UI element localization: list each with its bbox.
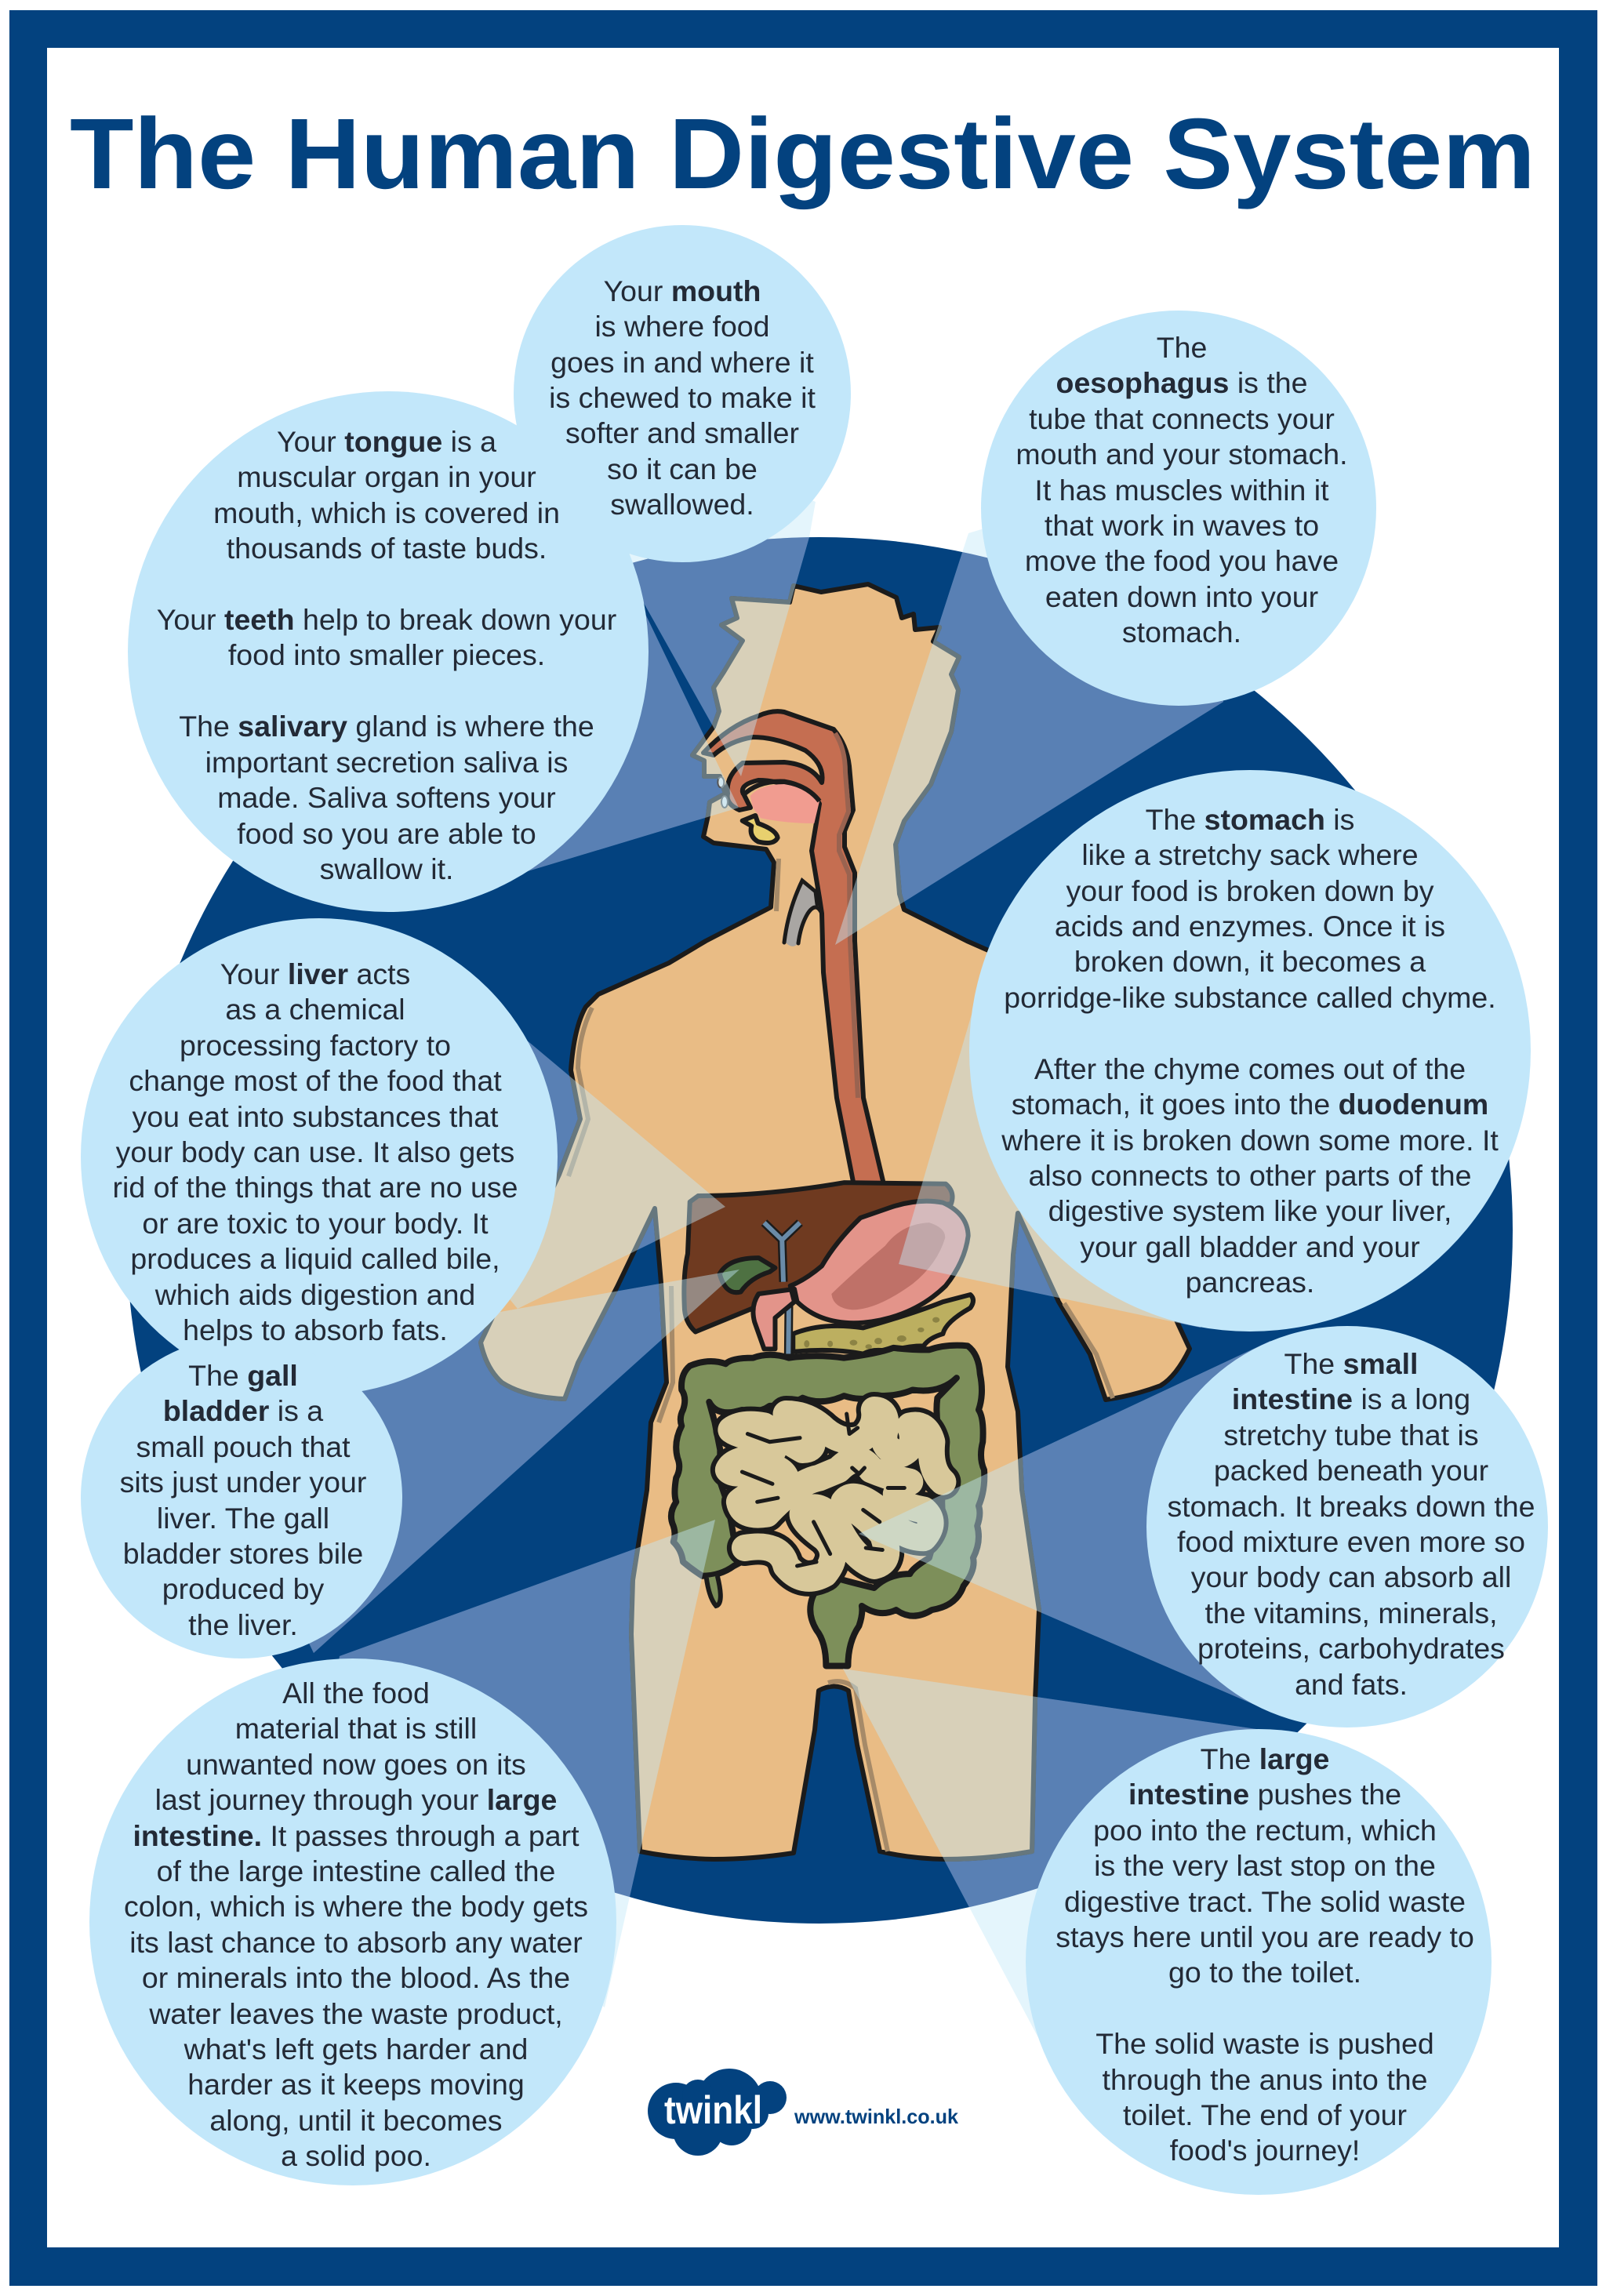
text: stomach: digestive system like your liver, <box>1048 1194 1452 1227</box>
human body figure <box>481 584 1190 1859</box>
text: liver: as a chemical <box>225 993 405 1026</box>
text: mouth <box>549 274 816 521</box>
text: oesophagus: mouth and your stomach. <box>1016 438 1348 470</box>
text: oesophagus: It has muscles within it <box>1034 474 1329 507</box>
website url: www.twinkl.co.uk <box>794 2105 959 2128</box>
text: liver: Your liver acts <box>220 957 410 990</box>
text: large intestine right: The large <box>1201 1742 1329 1775</box>
text: tongue, teeth, salivary gland <box>157 425 616 885</box>
text: stomach: your gall bladder and your <box>1080 1230 1420 1263</box>
text: liver: rid of the things that are no use <box>113 1171 518 1204</box>
pancreas <box>793 1295 973 1354</box>
text: large intestine left: material that is still <box>235 1712 477 1745</box>
text: tongue, teeth, salivary gland: mouth, which is covered in <box>213 496 560 529</box>
text: small intestine: The small <box>1284 1347 1418 1380</box>
text: oesophagus: that work in waves to <box>1045 509 1319 542</box>
text: liver: change most of the food that <box>129 1064 502 1097</box>
callout wedges pointing to organs <box>235 439 1333 2058</box>
wedge: stomach <box>899 1012 1250 1328</box>
callout circles <box>81 225 1548 2195</box>
pancreas spots <box>804 1317 939 1349</box>
text: large intestine left: harder as it keeps moving <box>187 2068 525 2101</box>
text: small intestine: your body can absorb all <box>1191 1560 1511 1593</box>
text: small intestine: packed beneath your <box>1214 1454 1488 1487</box>
text: large intestine left <box>124 1677 588 2172</box>
text: gall bladder: small pouch that <box>136 1430 351 1463</box>
text: stomach: also connects to other parts of the <box>1029 1159 1471 1192</box>
text: mouth: is chewed to make it <box>549 381 816 414</box>
text: liver: processing factory to <box>180 1029 451 1062</box>
text: stomach: broken down, it becomes a <box>1074 945 1426 978</box>
text: mouth: is where food <box>594 310 770 343</box>
text: gall bladder: sits just under your <box>120 1466 366 1499</box>
text: large intestine left: last journey through your large <box>155 1783 557 1816</box>
text: stomach: pancreas. <box>1186 1266 1314 1299</box>
text: tongue, teeth, salivary gland: The salivary gland is where the <box>179 710 594 743</box>
text: stomach: like a stretchy sack where <box>1081 838 1419 871</box>
text: oesophagus <box>1016 331 1348 648</box>
text: mouth: softer and smaller <box>565 416 799 449</box>
text: oesophagus: tube that connects your <box>1029 402 1335 435</box>
text: gall bladder: bladder stores bile <box>123 1537 363 1570</box>
text: small intestine: intestine is a long <box>1232 1382 1470 1415</box>
text: liver: which aids digestion and <box>154 1278 475 1311</box>
wedge: gall bladder <box>235 1270 739 1653</box>
small intestine coils <box>729 1410 943 1578</box>
text: large intestine right: through the anus into the <box>1103 2063 1427 2096</box>
text: large intestine left: a solid poo. <box>281 2139 431 2172</box>
text: oesophagus: The <box>1157 331 1207 364</box>
stomach <box>753 1201 968 1349</box>
body edge shadows <box>569 859 1113 1851</box>
bile duct <box>764 1222 800 1358</box>
circle: large intestine left <box>89 1658 616 2185</box>
text: oesophagus: eaten down into your <box>1045 580 1318 613</box>
text: gall bladder: the liver. <box>188 1608 298 1641</box>
circle: gall bladder <box>81 1337 402 1658</box>
circle: oesophagus <box>981 311 1376 706</box>
esophagus shadow <box>835 733 858 1098</box>
text: stomach: stomach, it goes into the duodenum <box>1012 1088 1488 1121</box>
text: mouth: Your mouth <box>604 274 761 307</box>
text: tongue, teeth, salivary gland: food so you are able to <box>237 817 536 850</box>
text: oesophagus: move the food you have <box>1025 544 1339 577</box>
text: tongue, teeth, salivary gland: Your tongue is a <box>277 425 496 458</box>
text: large intestine left: its last chance to absorb any water <box>129 1926 583 1959</box>
text: large intestine right: go to the toilet. <box>1168 1956 1361 1989</box>
text: liver: produces a liquid called bile, <box>130 1242 500 1275</box>
text: large intestine right: intestine pushes the <box>1128 1778 1401 1811</box>
text: small intestine: food mixture even more so <box>1177 1525 1525 1558</box>
circle: small intestine <box>1146 1326 1548 1727</box>
teeth <box>718 777 724 787</box>
text: mouth: goes in and where it <box>550 346 814 379</box>
text: gall bladder: bladder is a <box>163 1394 323 1427</box>
text: small intestine: proteins, carbohydrates <box>1197 1632 1505 1665</box>
text: tongue, teeth, salivary gland: food into smaller pieces. <box>228 638 545 671</box>
organs in the abdomen <box>671 1183 984 1666</box>
text: large intestine right: food's journey! <box>1170 2134 1360 2167</box>
text: large intestine left: what's left gets harder and <box>183 2033 528 2065</box>
text: oesophagus: stomach. <box>1122 616 1241 648</box>
logo: twinkl cloud <box>648 2069 787 2156</box>
navy background circle <box>126 537 1513 1924</box>
text: gall bladder: liver. The gall <box>157 1502 329 1535</box>
text: gall bladder: The gall <box>188 1359 298 1392</box>
wedge: mouth <box>605 439 816 776</box>
text: large intestine left: of the large intestine called the <box>157 1855 555 1887</box>
text: large intestine left: colon, which is where the body gets <box>124 1890 588 1923</box>
mouth and throat details <box>718 777 819 843</box>
text: stomach: acids and enzymes. Once it is <box>1055 910 1445 943</box>
pink mouth cavity <box>750 784 819 823</box>
text: mouth: swallowed. <box>610 488 754 521</box>
text: stomach <box>1001 803 1499 1299</box>
wedge: large intestine left <box>314 1520 715 2007</box>
circle: stomach <box>969 770 1531 1331</box>
large intestine colon <box>671 1346 984 1666</box>
text: small intestine <box>1167 1347 1535 1701</box>
text: liver: or are toxic to your body. It <box>142 1207 489 1240</box>
text: gall bladder: produced by <box>162 1572 324 1605</box>
text: liver: your body can use. It also gets <box>116 1135 514 1168</box>
text: tongue, teeth, salivary gland: swallow it. <box>320 852 453 885</box>
text: large intestine left: All the food <box>282 1677 430 1709</box>
text: large intestine right <box>1056 1742 1474 2167</box>
text: stomach: where it is broken down some more. It <box>1001 1124 1499 1157</box>
text: tongue, teeth, salivary gland: made. Saliva softens your <box>217 781 556 814</box>
circle: large intestine right <box>1026 1729 1492 2195</box>
text: tongue, teeth, salivary gland: thousands of taste buds. <box>227 532 547 565</box>
wedge: tongue <box>471 549 739 888</box>
text: stomach: The stomach is <box>1146 803 1354 836</box>
circle: liver <box>81 918 558 1395</box>
text: tongue, teeth, salivary gland: Your teeth help to break down your <box>157 603 616 636</box>
text: small intestine: stomach. It breaks down the <box>1167 1490 1535 1523</box>
wedge: oesophagus <box>835 470 1223 945</box>
text: large intestine left: or minerals into the blood. As the <box>142 1961 570 1994</box>
text: stomach: porridge-like substance called chyme. <box>1004 981 1496 1014</box>
wedge: large intestine right <box>843 1669 1294 2058</box>
logo: twinkl cloud: twinkl <box>664 2088 762 2132</box>
text: large intestine right: stays here until you are ready to <box>1056 1920 1474 1953</box>
text: liver: you eat into substances that <box>133 1100 499 1133</box>
text: small intestine: stretchy tube that is <box>1223 1419 1479 1451</box>
text: large intestine right: is the very last stop on the <box>1094 1849 1436 1882</box>
text: gall bladder <box>120 1359 366 1641</box>
wedge: liver <box>392 1019 725 1309</box>
salivary gland <box>743 816 778 843</box>
circle: mouth <box>514 225 851 562</box>
wedge: small intestine <box>859 1341 1333 1715</box>
text: large intestine left: unwanted now goes on its <box>186 1748 526 1781</box>
text: large intestine right: digestive tract. The solid waste <box>1064 1885 1466 1918</box>
appendix <box>707 1576 721 1606</box>
text: large intestine left: water leaves the waste product, <box>148 1997 563 2030</box>
esophagus and nasal passage <box>703 711 889 1218</box>
title: The Human Digestive System <box>70 98 1535 210</box>
text: oesophagus: oesophagus is the <box>1056 366 1307 399</box>
text: tongue, teeth, salivary gland: muscular organ in your <box>237 460 536 493</box>
text: large intestine left: along, until it becomes <box>209 2104 503 2137</box>
text: large intestine right: poo into the rectum, which <box>1093 1814 1437 1847</box>
text: large intestine right: toilet. The end of your <box>1123 2098 1407 2131</box>
text: stomach: your food is broken down by <box>1066 874 1434 907</box>
text: liver <box>113 957 518 1346</box>
text: stomach: After the chyme comes out of the <box>1034 1052 1466 1085</box>
circle: tongue <box>128 391 649 912</box>
trachea <box>784 881 821 946</box>
text: small intestine: the vitamins, minerals, <box>1204 1597 1498 1629</box>
text: large intestine left: intestine. It passes through a part <box>133 1819 580 1852</box>
stomach inner fold <box>831 1222 945 1310</box>
text: mouth: so it can be <box>607 452 758 485</box>
text: large intestine right: The solid waste is pushed <box>1095 2027 1434 2060</box>
text: liver: helps to absorb fats. <box>183 1313 448 1346</box>
text: small intestine: and fats. <box>1295 1668 1408 1701</box>
liver <box>684 1183 953 1331</box>
gall bladder <box>720 1258 775 1292</box>
text: tongue, teeth, salivary gland: important secretion saliva is <box>205 746 568 779</box>
body silhouette <box>481 584 1190 1859</box>
